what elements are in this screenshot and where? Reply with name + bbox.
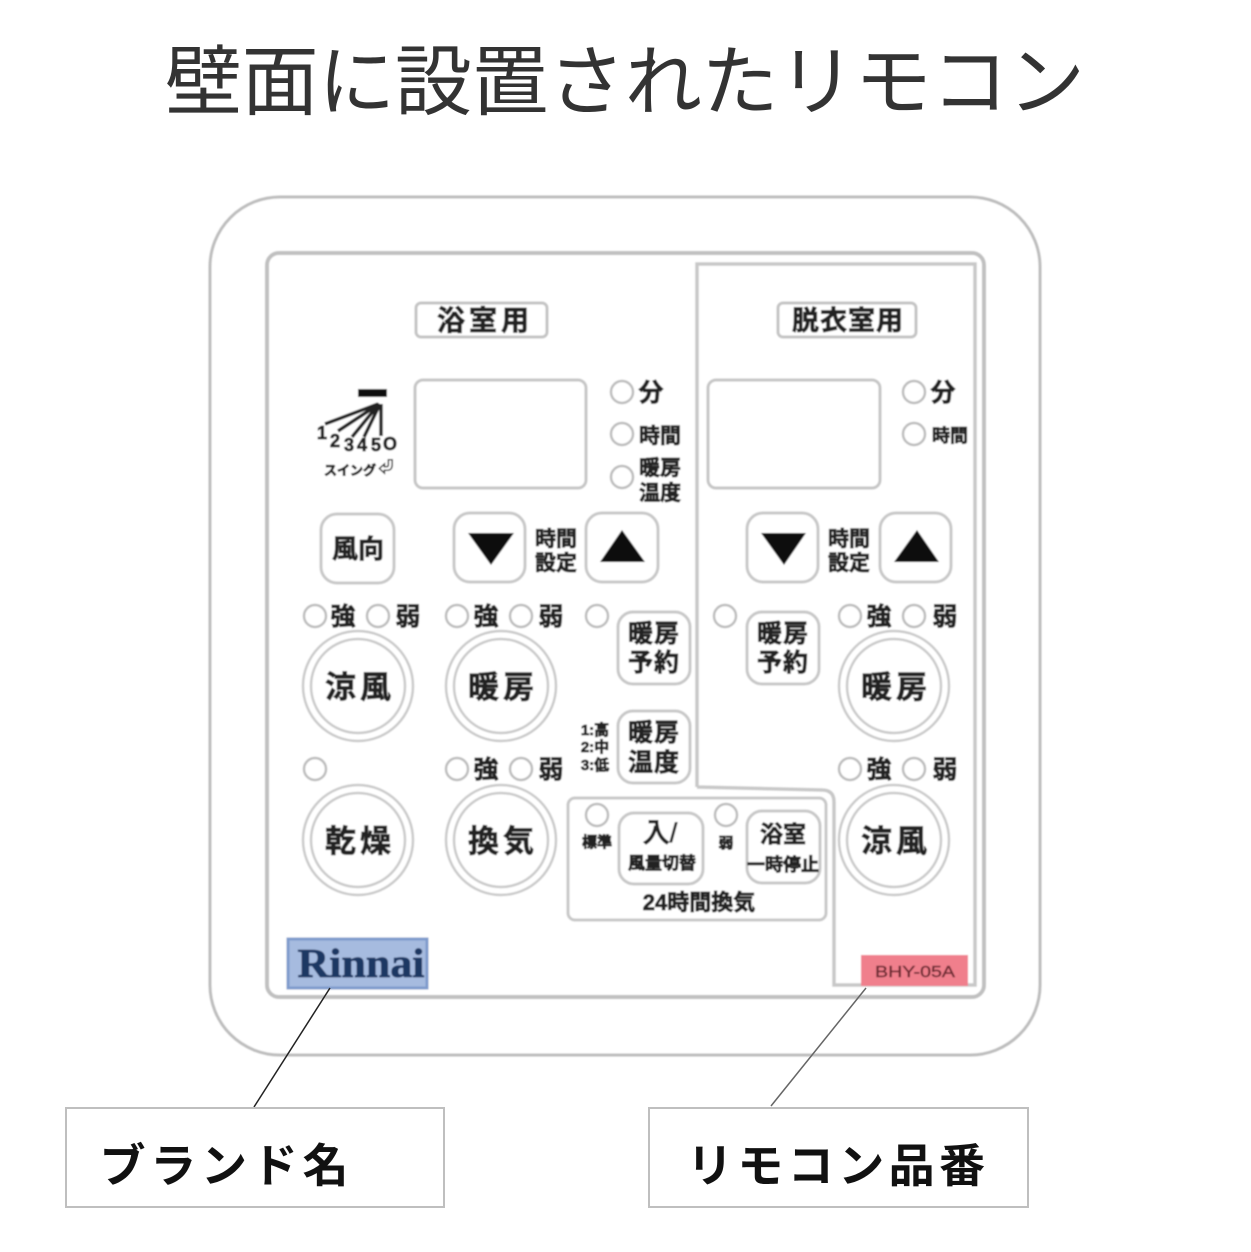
bathroom display indicators: 時間	[639, 425, 681, 448]
icon: louver swing: 12345O	[317, 423, 397, 455]
changing room section outline	[697, 264, 975, 985]
button: wind direction	[321, 514, 394, 583]
indicators row two: 弱	[538, 756, 564, 784]
indicators row one: 弱	[538, 603, 564, 631]
title: 壁面に設置されたリモコン	[165, 40, 1085, 126]
changing room time setting: 時間	[828, 528, 870, 551]
inner panel	[267, 253, 984, 997]
indicators row two	[304, 756, 958, 784]
bathroom display indicators	[611, 379, 681, 505]
button: drying	[303, 785, 413, 895]
indicators row two: 強	[473, 756, 499, 784]
button: heating temperature: 温度	[628, 749, 680, 777]
button: heating timer bathroom: 暖房	[628, 620, 680, 648]
changing room display indicators: 時間	[932, 426, 968, 446]
bathroom time setting: 設定	[535, 552, 577, 575]
button: cool air changing room	[839, 785, 949, 895]
changing room display indicators: 分	[930, 379, 956, 407]
24 hour ventilation group: 弱	[718, 835, 734, 852]
bathroom display indicators: 暖房	[639, 457, 681, 480]
leader line: brand	[254, 988, 330, 1107]
indicators row one	[304, 603, 958, 631]
heating temperature levels: 1:高	[581, 722, 609, 739]
indicators row one: 強	[866, 603, 892, 631]
indicators row one: 弱	[932, 603, 958, 631]
button: ventilation: 換気	[468, 824, 538, 859]
indicators row one: 強	[473, 603, 499, 631]
24 hour ventilation group: 標準	[582, 833, 612, 851]
bathroom time setting	[454, 513, 658, 582]
changing room heading: 脱衣室用	[792, 306, 904, 336]
bathroom display indicators: 分	[638, 379, 664, 407]
24 hour ventilation group: 浴室	[760, 821, 806, 847]
callout: brand name: ブランド名	[100, 1140, 348, 1192]
indicators row two: 強	[866, 756, 892, 784]
bathroom heading	[416, 303, 547, 337]
button: heating timer bathroom: 予約	[628, 649, 680, 677]
button: ventilation	[446, 785, 556, 895]
button: wind direction: 風向	[332, 534, 384, 564]
remote control illustration	[210, 197, 1040, 1055]
bathroom heading: 浴室用	[437, 305, 533, 336]
changing room time setting	[747, 513, 951, 582]
button: drying: 乾燥	[325, 824, 395, 859]
24 hour ventilation group	[568, 798, 826, 920]
model number highlight: BHY-05A	[875, 964, 955, 981]
button: heating changing room: 暖房	[861, 670, 931, 705]
button: cool air changing room: 涼風	[861, 824, 931, 859]
button: heating timer changing room: 暖房	[757, 620, 809, 648]
button: heating bathroom: 暖房	[468, 670, 538, 705]
indicators row one: 弱	[395, 603, 421, 631]
24 hour ventilation group: 一時停止	[747, 855, 819, 875]
icon: louver swing	[317, 389, 397, 478]
icon: louver swing: スイング	[324, 463, 376, 478]
brand logo highlight: Rinnai	[298, 940, 424, 986]
icon: louver swing: ⏎	[378, 459, 394, 476]
heating temperature levels	[581, 722, 609, 774]
changing room display	[708, 380, 880, 488]
24 hour ventilation group: 24時間換気	[643, 890, 755, 915]
changing room time setting: 設定	[828, 552, 870, 575]
button: heating timer changing room	[747, 612, 819, 684]
callout: brand name	[66, 1108, 444, 1207]
callout: remote model number	[649, 1108, 1028, 1207]
button: heating temperature: 暖房	[628, 719, 680, 747]
button: cool air bathroom: 涼風	[325, 670, 395, 705]
indicators row one: 強	[330, 603, 356, 631]
heating temperature levels: 2:中	[581, 739, 609, 756]
bathroom time setting: 時間	[535, 528, 577, 551]
heating temperature levels: 3:低	[581, 757, 609, 774]
changing room display indicators	[903, 379, 968, 446]
button: heating bathroom	[446, 631, 556, 741]
callout: remote model number: リモコン品番	[687, 1140, 985, 1192]
button: cool air bathroom	[303, 631, 413, 741]
model number highlight	[861, 955, 968, 986]
indicators row two: 弱	[932, 756, 958, 784]
button: heating timer changing room: 予約	[757, 649, 809, 677]
button: heating temperature	[618, 711, 690, 783]
leader line: model number	[771, 988, 866, 1106]
24 hour ventilation group: 入/	[643, 818, 678, 848]
remote outer casing	[210, 197, 1040, 1055]
bathroom display indicators: 温度	[639, 482, 681, 505]
button: heating changing room	[839, 631, 949, 741]
24 hour ventilation group: 風量切替	[628, 854, 696, 873]
button: heating timer bathroom	[618, 612, 690, 684]
bathroom display	[415, 380, 586, 488]
